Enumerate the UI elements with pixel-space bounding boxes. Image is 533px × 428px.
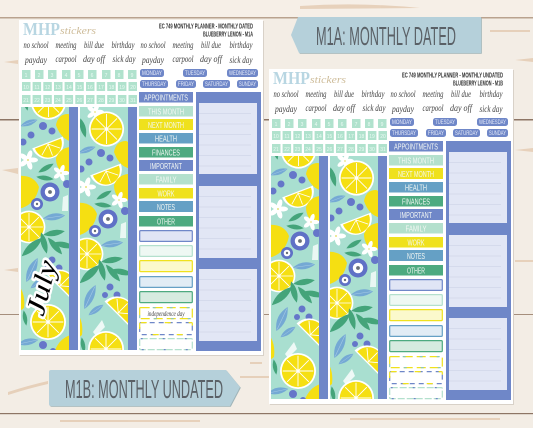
- date number grid: 6: [341, 122, 344, 128]
- blank outlined boxes: independence day: [148, 310, 185, 318]
- date number grid: 21: [23, 98, 29, 104]
- heading tabs: APPOINTMENTS: [394, 142, 438, 152]
- weekday labels: MONDAY: [142, 71, 162, 77]
- heading tabs: IMPORTANT: [150, 162, 182, 171]
- weekday labels: TUESDAY: [185, 71, 205, 77]
- logo: stickers: [310, 74, 346, 86]
- heading tabs: [139, 92, 193, 226]
- date number grid: 16: [337, 134, 343, 140]
- sheet: monthly undated: [250, 68, 514, 428]
- date number grid: 10: [23, 85, 29, 91]
- logo: stickers: [60, 25, 96, 37]
- date number grid: 22: [34, 98, 40, 104]
- label arrow: M1B monthly undated: [49, 370, 241, 407]
- date number grid: 29: [109, 98, 114, 104]
- date number grid: 23: [45, 98, 50, 104]
- script word stickers: sick day: [480, 105, 503, 115]
- date number grid: [272, 119, 387, 153]
- heading tabs: OTHER: [157, 218, 175, 226]
- date number grid: 17: [98, 85, 104, 91]
- heading tabs: THIS MONTH: [148, 108, 184, 116]
- lined note panels: [196, 92, 261, 351]
- script word stickers: no school: [390, 90, 416, 100]
- date number grid: 3: [51, 73, 54, 79]
- date number grid: 13: [55, 85, 61, 91]
- July script sticker: July: [20, 257, 63, 319]
- lined note panels: [446, 141, 511, 400]
- heading tabs: OTHER: [407, 266, 425, 276]
- weekday labels: THURSDAY: [392, 131, 416, 137]
- date number grid: 22: [284, 147, 290, 153]
- script word stickers: meeting: [422, 90, 444, 100]
- date number grid: 28: [348, 147, 354, 153]
- date number grid: 14: [316, 134, 322, 140]
- logo: MHP: [273, 68, 310, 88]
- date number grid: 11: [34, 85, 40, 91]
- date number grid: 28: [98, 98, 104, 104]
- script word stickers: birthday: [362, 90, 385, 100]
- date number grid: 27: [87, 98, 93, 104]
- date number grid: 31: [130, 98, 136, 104]
- script word stickers: birthday: [112, 41, 135, 51]
- date number grid: 11: [284, 134, 290, 140]
- weekday labels: FRIDAY: [178, 82, 194, 88]
- script word stickers: no school: [140, 41, 166, 51]
- date number grid: 12: [45, 85, 50, 91]
- heading tabs: NOTES: [157, 203, 175, 212]
- floral lemon strips: [250, 103, 398, 428]
- heading tabs: FAMILY: [156, 176, 177, 184]
- date number grid: 9: [381, 122, 384, 128]
- script word stickers: carpool: [422, 104, 444, 114]
- date number grid: 29: [359, 147, 364, 153]
- heading tabs: HEALTH: [155, 134, 177, 144]
- script word stickers: meeting: [306, 90, 327, 100]
- heading tabs: [389, 141, 443, 276]
- date number grid: 26: [77, 98, 82, 104]
- date number grid: 16: [87, 85, 93, 91]
- weekday labels: SATURDAY: [205, 82, 228, 88]
- floral lemon strips: [0, 54, 148, 397]
- script word stickers: bill due: [451, 90, 471, 100]
- date number grid: 3: [301, 122, 304, 128]
- date number grid: 2: [38, 73, 41, 79]
- date number grid: 20: [380, 134, 386, 140]
- date number grid: 10: [273, 134, 279, 140]
- blank outlined boxes: [390, 280, 442, 399]
- heading tabs: NOTES: [407, 252, 425, 261]
- logo: [273, 68, 346, 88]
- heading tabs: HEALTH: [405, 184, 427, 192]
- script word stickers: payday: [141, 56, 165, 66]
- weekday labels: [390, 118, 508, 137]
- script word stickers: [274, 90, 503, 115]
- label arrow: M1B monthly undated: M1B: MONTHLY UNDATED: [65, 374, 223, 404]
- date number grid: 7: [105, 73, 108, 79]
- date number grid: 1: [25, 73, 28, 79]
- script word stickers: bill due: [201, 41, 221, 51]
- heading tabs: APPOINTMENTS: [144, 94, 188, 102]
- sheet title: [159, 22, 253, 38]
- heading tabs: NEXT MONTH: [398, 170, 434, 179]
- script word stickers: payday: [24, 56, 48, 66]
- date number grid: 5: [78, 73, 81, 79]
- date number grid: [22, 70, 137, 104]
- weekday labels: WEDNESDAY: [229, 71, 256, 77]
- date number grid: 18: [109, 85, 114, 91]
- date number grid: 8: [368, 122, 371, 128]
- blank outlined boxes: [140, 231, 192, 350]
- date number grid: 31: [380, 147, 386, 153]
- script word stickers: no school: [24, 41, 49, 51]
- weekday labels: SATURDAY: [455, 131, 478, 137]
- script word stickers: sick day: [112, 55, 136, 65]
- date number grid: 25: [66, 98, 72, 104]
- heading tabs: FAMILY: [406, 224, 427, 234]
- weekday labels: MONDAY: [392, 120, 412, 126]
- date number grid: 27: [337, 147, 343, 153]
- script word stickers: birthday: [230, 41, 253, 51]
- heading tabs: IMPORTANT: [400, 211, 432, 220]
- date number grid: 15: [77, 85, 82, 91]
- date number grid: 14: [66, 85, 72, 91]
- date number grid: 17: [348, 134, 354, 140]
- heading tabs: WORK: [158, 190, 175, 198]
- weekday labels: FRIDAY: [428, 131, 444, 137]
- date number grid: 1: [275, 122, 278, 128]
- weekday labels: THURSDAY: [142, 82, 166, 88]
- script word stickers: day off: [200, 54, 223, 65]
- logo: [23, 19, 96, 39]
- script word stickers: payday: [274, 105, 298, 115]
- date number grid: 18: [359, 134, 364, 140]
- date number grid: 21: [273, 147, 279, 153]
- date number grid: 2: [288, 122, 291, 128]
- date number grid: 20: [130, 85, 136, 91]
- date number grid: 19: [369, 134, 375, 140]
- date number grid: 13: [305, 134, 311, 140]
- heading tabs: WORK: [408, 238, 425, 248]
- date number grid: 7: [355, 122, 358, 128]
- date number grid: 23: [295, 147, 300, 153]
- date number grid: 15: [327, 134, 332, 140]
- script word stickers: sick day: [362, 104, 386, 114]
- script word stickers: payday: [391, 105, 415, 115]
- script word stickers: [24, 41, 253, 66]
- date number grid: 8: [118, 73, 121, 79]
- script word stickers: birthday: [480, 90, 503, 100]
- heading tabs: FINANCES: [402, 198, 430, 206]
- script word stickers: day off: [83, 54, 106, 65]
- date number grid: 30: [369, 147, 375, 153]
- sheet title: EC 749 MONTHLY PLANNER - MONTHLY DATED: [159, 22, 253, 30]
- date number grid: 26: [327, 147, 332, 153]
- script word stickers: carpool: [56, 55, 77, 65]
- date number grid: 24: [305, 147, 311, 153]
- weekday labels: SUNDAY: [239, 82, 256, 88]
- script word stickers: day off: [333, 103, 356, 114]
- sheet: monthly dated: [0, 19, 264, 397]
- date number grid: 5: [328, 122, 331, 128]
- weekday labels: WEDNESDAY: [479, 120, 506, 126]
- date number grid: 6: [91, 73, 94, 79]
- date number grid: 4: [315, 122, 318, 128]
- heading tabs: THIS MONTH: [398, 156, 434, 166]
- date number grid: 19: [119, 85, 125, 91]
- date number grid: 30: [119, 98, 125, 104]
- heading tabs: NEXT MONTH: [148, 121, 184, 130]
- script word stickers: carpool: [306, 104, 327, 114]
- date number grid: 25: [316, 147, 322, 153]
- label arrow: M1A monthly dated: [291, 17, 482, 54]
- script word stickers: no school: [274, 90, 299, 100]
- sheet title: BLUEBERRY LEMON - M1A: [203, 30, 253, 38]
- date number grid: 24: [55, 98, 61, 104]
- script word stickers: sick day: [230, 56, 253, 66]
- logo: MHP: [23, 19, 60, 39]
- script word stickers: bill due: [334, 90, 354, 100]
- script word stickers: meeting: [56, 41, 77, 51]
- heading tabs: FINANCES: [152, 148, 180, 158]
- script word stickers: meeting: [172, 41, 194, 51]
- date number grid: 12: [295, 134, 300, 140]
- weekday labels: TUESDAY: [435, 120, 455, 126]
- sheet title: [402, 70, 503, 88]
- weekday labels: SUNDAY: [489, 131, 506, 137]
- date number grid: 9: [131, 73, 134, 79]
- weekday labels: [140, 69, 258, 88]
- date number grid: 4: [65, 73, 68, 79]
- script word stickers: day off: [450, 103, 473, 114]
- script word stickers: bill due: [84, 41, 104, 51]
- script word stickers: carpool: [172, 55, 194, 65]
